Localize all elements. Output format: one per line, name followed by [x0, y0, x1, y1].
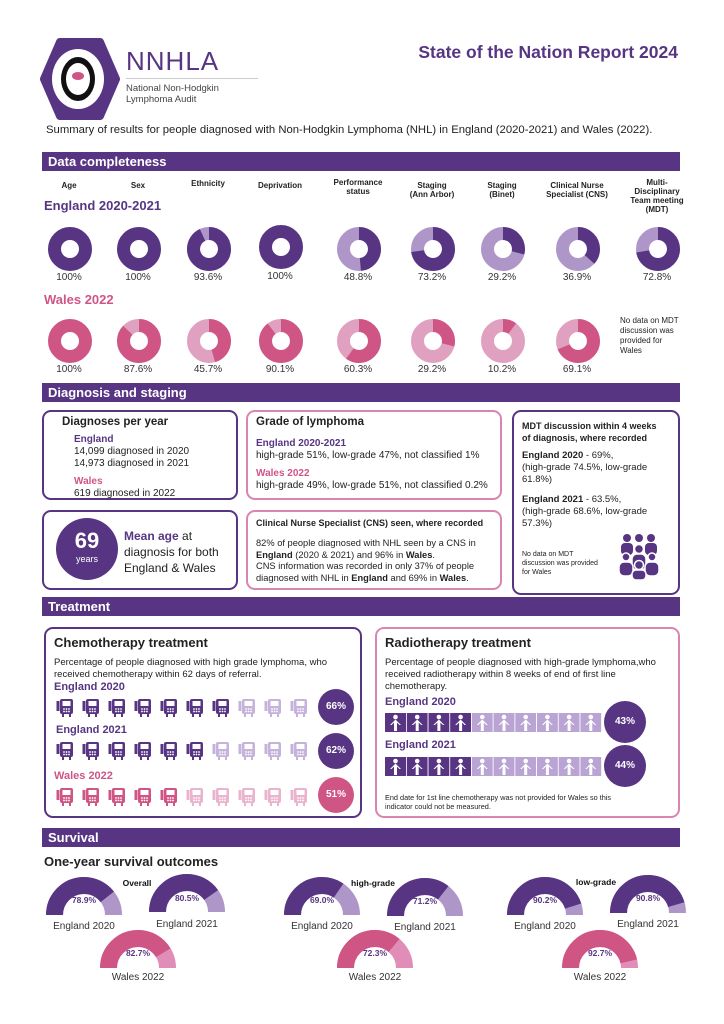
gauge: high England 2020 [292, 886, 352, 915]
section bar: survival [42, 828, 680, 847]
percentages Wales: 90.1% [266, 364, 294, 375]
gauges: England 2021 [156, 919, 218, 930]
column headers: Staging [417, 181, 447, 190]
badge: 69 years: years [76, 554, 98, 564]
gauges [46, 874, 686, 983]
gauges: 71.2% [413, 896, 437, 906]
percentages Wales: 29.2% [418, 364, 446, 375]
column headers: (MDT) [646, 205, 668, 214]
column headers: Staging [487, 181, 517, 190]
badge 43% [604, 701, 646, 743]
panel: diagnoses per year: 14,973 diagnosed in 2021 [74, 458, 189, 469]
panel: chemotherapy: Percentage of people diagnosed with high grade lymphoma, who [54, 657, 327, 668]
column headers [61, 178, 684, 214]
icons: radiotherapy England 2021 [385, 757, 602, 776]
percentages England: 93.6% [194, 272, 222, 283]
percentages England: 48.8% [344, 272, 372, 283]
percentages England: 100% [267, 271, 293, 282]
panel: chemotherapy: received chemotherapy within 62 days of referral. [54, 669, 262, 680]
panel: radiotherapy: Percentage of people diagnosed with high-grade lymphoma,who [385, 657, 656, 668]
gauges: England 2021 [394, 922, 456, 933]
section bar: treatment [42, 597, 680, 616]
logo: NNHLA [126, 46, 219, 76]
column headers: Team meeting [630, 196, 684, 205]
column headers: Specialist (CNS) [546, 190, 608, 199]
panel: chemotherapy [44, 627, 362, 818]
section bar: survival: Survival [48, 830, 99, 845]
percentages Wales: 60.3% [344, 364, 372, 375]
badge: 69 years [56, 518, 118, 580]
icons: chemo England 2020 [56, 699, 307, 717]
panel: MDT discussion [512, 410, 680, 595]
icons: chemo England 2021 [56, 742, 307, 760]
panel: diagnoses per year: England [74, 434, 113, 445]
panel: MDT discussion: for Wales [522, 569, 551, 576]
gauges: England 2020 [514, 921, 576, 932]
gauge: high Wales [346, 938, 404, 968]
note: no MDT data Wales [620, 316, 679, 355]
column headers: Sex [131, 181, 145, 190]
section bar: data completeness [42, 152, 680, 171]
panel: radiotherapy: England 2021 [385, 739, 456, 751]
panel: CNS seen: England (2020 & 2021) and 96% in Wales. [256, 550, 435, 560]
percentages Wales: 100% [56, 364, 82, 375]
donuts England [48, 225, 680, 271]
column headers: Deprivation [258, 181, 302, 190]
badge 51% [318, 777, 354, 813]
column headers: (Ann Arbor) [410, 190, 454, 199]
badge 44% [604, 745, 646, 787]
panel: MDT discussion: MDT discussion within 4 weeks [522, 421, 657, 431]
gauges: low-grade [576, 877, 616, 887]
panel: diagnoses per year: 619 diagnosed in 2022 [74, 488, 175, 499]
icons: chemo Wales 2022 [56, 788, 307, 806]
panel: diagnoses per year [42, 410, 238, 500]
column headers: (Binet) [489, 190, 515, 199]
panel: radiotherapy: indicator could not be measured. [385, 802, 491, 811]
panel: radiotherapy: End date for 1st line chemotherapy was not provided for Wales so this [385, 793, 611, 802]
panel: radiotherapy: England 2020 [385, 696, 456, 708]
gauges: 78.9% [72, 895, 96, 905]
gauges: England 2021 [617, 919, 679, 930]
panel: radiotherapy: received radiotherapy within 8 weeks of end of first line [385, 669, 616, 680]
panel: MDT discussion: (high-grade 74.5%, low-grade [522, 462, 647, 473]
panel: grade of lymphoma: high-grade 49%, low-grade 51%, not classified 0.2% [256, 480, 488, 491]
gauge: low England 2020 [516, 886, 574, 915]
percentages Wales [56, 364, 591, 375]
percentages England [56, 271, 671, 283]
percentages England: 73.2% [418, 272, 446, 283]
badge 44%: 44% [615, 760, 635, 771]
panel: chemotherapy: Chemotherapy treatment [54, 635, 208, 650]
label: Wales 2022: Wales 2022 [44, 292, 114, 307]
gauges: Wales 2022 [112, 972, 165, 983]
label: England 2020-2021: England 2020-2021 [44, 198, 161, 213]
panel: MDT discussion: 61.8%) [522, 474, 552, 485]
column headers: Performance [334, 178, 382, 187]
badge 43%: 43% [615, 716, 635, 727]
panel: CNS seen: 82% of people diagnosed with NHL seen by a CNS in [256, 538, 476, 548]
logo: National Non-Hodgkin [126, 83, 219, 94]
column headers: Multi- [646, 178, 668, 187]
gauges: 69.0% [310, 895, 334, 905]
panel: diagnoses per year: Diagnoses per year [62, 416, 168, 428]
panel: grade of lymphoma: Wales 2022 [256, 468, 310, 479]
panel: mean age: England & Wales [124, 561, 216, 575]
gauges: high-grade [351, 878, 395, 888]
gauge: overall England 2021 [158, 882, 216, 912]
column headers: Age [61, 181, 77, 190]
icons: radiotherapy England 2020 [385, 713, 602, 732]
section bar: data completeness: Data completeness [48, 154, 166, 169]
badge 51%: 51% [326, 789, 346, 800]
title: State of the Nation Report 2024 [418, 42, 678, 62]
column headers: Disciplinary [634, 187, 680, 196]
badge 62% [318, 733, 354, 769]
percentages England: 36.9% [563, 272, 591, 283]
panel: chemotherapy: England 2020 [54, 681, 125, 693]
logo [40, 38, 258, 120]
gauges: 72.3% [363, 948, 387, 958]
column headers: status [346, 187, 370, 196]
percentages Wales: 69.1% [563, 364, 591, 375]
column headers: Clinical Nurse [550, 181, 604, 190]
panel: MDT discussion: discussion was provided [522, 560, 598, 567]
panel: MDT discussion: No data on MDT [522, 551, 573, 558]
section bar: treatment: Treatment [48, 599, 110, 614]
percentages Wales: 45.7% [194, 364, 222, 375]
badge 66% [318, 689, 354, 725]
panel: MDT discussion: England 2020 - 69%, [522, 450, 613, 461]
badge 62%: 62% [326, 745, 346, 756]
gauge: low Wales [570, 938, 630, 968]
panel: grade of lymphoma: England 2020-2021 [256, 438, 346, 449]
panel: MDT discussion: England 2021 - 63.5%, [522, 494, 621, 505]
panel: mean age: Mean age at [124, 529, 192, 543]
panel: radiotherapy: chemotherapy. [385, 681, 447, 692]
gauges: Wales 2022 [349, 972, 402, 983]
panel: grade of lymphoma: Grade of lymphoma [256, 416, 364, 428]
badge 66%: 66% [326, 701, 346, 712]
panel: grade of lymphoma [246, 410, 502, 500]
gauges: 90.2% [533, 895, 557, 905]
percentages England: 72.8% [643, 272, 671, 283]
percentages Wales: 10.2% [488, 364, 516, 375]
note: no MDT data Wales: Wales [620, 346, 642, 355]
section bar: diagnosis and staging [42, 383, 680, 402]
panel: mean age [42, 510, 238, 590]
panel: chemotherapy: Wales 2022 [54, 770, 113, 782]
panel: CNS seen: diagnosed with NHL in England and 69% in Wales. [256, 572, 469, 582]
badge: 69 years: 69 [75, 528, 99, 553]
panel: mean age: diagnosis for both [124, 545, 219, 559]
panel: grade of lymphoma: high-grade 51%, low-grade 47%, not classified 1% [256, 450, 479, 461]
section bar: diagnosis and staging: Diagnosis and staging [48, 385, 187, 400]
note: no MDT data Wales: discussion was [620, 326, 674, 335]
panel: MDT discussion: (high-grade 68.6%, low-grade [522, 506, 647, 517]
gauges: 92.7% [588, 948, 612, 958]
donuts Wales [48, 319, 600, 363]
gauges: 90.8% [636, 893, 660, 903]
note: no MDT data Wales: provided for [620, 336, 662, 345]
heading: one-year survival: One-year survival outcomes [44, 854, 218, 869]
percentages England: 29.2% [488, 272, 516, 283]
panel: MDT discussion: 57.3%) [522, 518, 552, 529]
gauges: 80.5% [175, 893, 199, 903]
gauges: Overall [123, 878, 151, 888]
note: no MDT data Wales: No data on MDT [620, 316, 679, 325]
icon: group of people [620, 534, 658, 580]
panel: CNS seen: CNS information was recorded in only 37% of people [256, 561, 474, 571]
gauge: overall England 2020 [54, 886, 114, 915]
panel: radiotherapy [375, 627, 680, 818]
panel: CNS seen: Clinical Nurse Specialist (CNS) seen, where recorded [256, 518, 483, 528]
gauges: Wales 2022 [574, 972, 627, 983]
gauge: low England 2021 [618, 884, 678, 913]
gauges: 82.7% [126, 948, 150, 958]
panel: MDT discussion: of diagnosis, where recorded [522, 433, 647, 443]
panel: chemotherapy: England 2021 [56, 724, 127, 736]
column headers: Ethnicity [191, 179, 225, 188]
panel: diagnoses per year: 14,099 diagnosed in 2020 [74, 446, 189, 457]
panel: CNS seen [246, 510, 502, 590]
panel: diagnoses per year: Wales [74, 476, 103, 487]
gauge: overall Wales [108, 938, 168, 968]
percentages England: 100% [56, 272, 82, 283]
gauges: England 2020 [291, 921, 353, 932]
logo: Lymphoma Audit [126, 94, 196, 105]
percentages Wales: 87.6% [124, 364, 152, 375]
gauge: high England 2021 [396, 886, 454, 916]
percentages England: 100% [125, 272, 151, 283]
summary text: Summary of results for people diagnosed with Non-Hodgkin Lymphoma (NHL) in England (2020-2021) and Wales (2022). [46, 124, 652, 136]
panel: radiotherapy: Radiotherapy treatment [385, 635, 531, 650]
gauges: England 2020 [53, 921, 115, 932]
